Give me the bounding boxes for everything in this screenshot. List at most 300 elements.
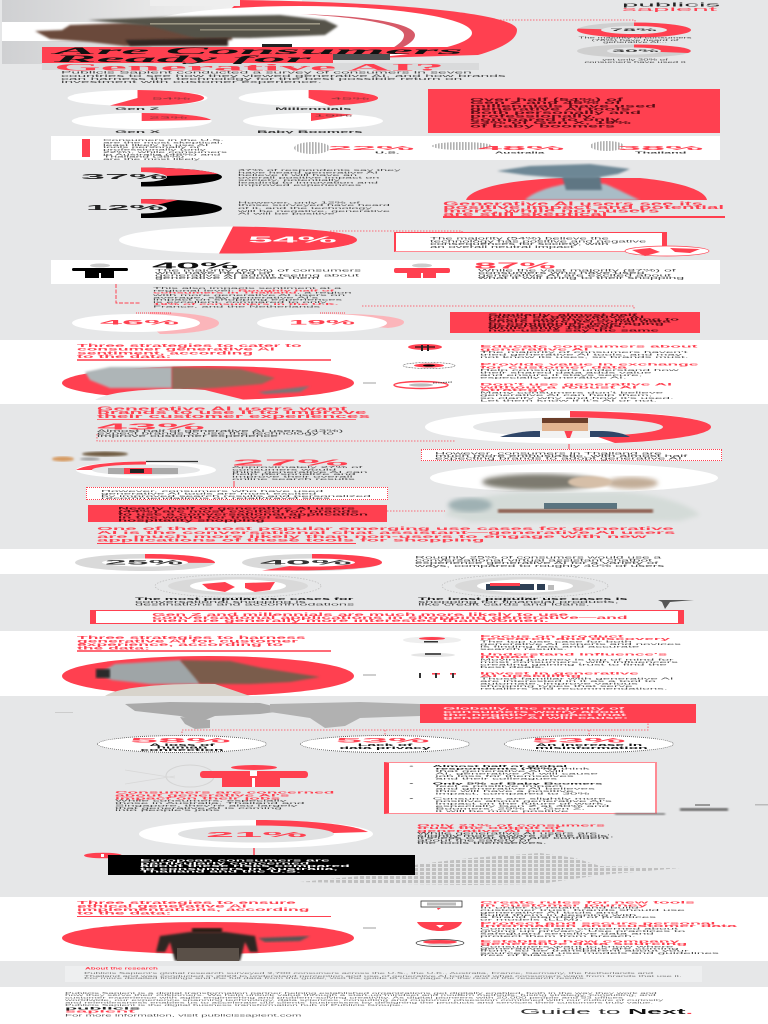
text: 40% description: The majority (60%) of consumers — [155, 268, 361, 272]
text: most popular use cases: conversational shopping is — [135, 600, 306, 604]
text: strategy 1 rules: In order to retain and build — [480, 906, 639, 909]
logo: publicis sapient footer — [65, 1007, 140, 1013]
text: job concerns — [115, 791, 334, 812]
chart: generation pies — [68, 90, 383, 129]
text: only 21% trust: the tools themselves. — [417, 842, 547, 845]
halftone map — [0, 696, 768, 896]
connector: dotted path from strip to paragraph — [116, 284, 634, 308]
text: bullet list: and their colleagues — [435, 777, 557, 780]
label: Australia: Australia — [495, 150, 544, 154]
text: callout copy: Thailand and the U.S. — [140, 869, 301, 873]
text: strategy 3 generative: shopping types that serve — [480, 684, 633, 688]
text: 40% description: generative AI excites them — [155, 276, 319, 280]
chart: 30% used generative AI — [577, 44, 691, 58]
text: regional sentiment: regional level: Roughly half of — [153, 288, 334, 292]
hero artwork: cyborg head on red arc — [2, 0, 517, 64]
text: callout copy: (44%) are most excited for brands — [118, 509, 359, 513]
text: strategy 1 rules: customer trust, brands should use — [480, 908, 685, 911]
text: about Publicis Sapient: how they serve their customers. We help unlock value through a start-up mindset and modern methods, fusing strategy, consulting, and — [65, 994, 656, 997]
icon: bird — [0, 574, 768, 631]
text: 27% description: think generative AI can — [232, 470, 367, 474]
text: regional sentiment: 19% of consumers in the U.K. — [153, 302, 338, 305]
text: 78% caption: generative AI... — [603, 41, 667, 44]
heading: users see positive impact: are still skeptical — [443, 212, 607, 217]
text: callout copy: However, consumers in Thailand are — [435, 451, 662, 455]
text: country summary: 22%), while consumers — [103, 151, 227, 154]
connector: dotted line to 78% donut — [500, 20, 636, 22]
text: chat assistant description: ways, compared to roughly 40% of users — [415, 564, 664, 568]
text: callout copy: Globally, the majority of — [443, 706, 624, 710]
logo: publicis sapient — [622, 2, 720, 13]
text: regional sentiment: is excellent, compared to only — [153, 300, 327, 303]
heading: users see positive impact: Generative AI users see its — [443, 201, 703, 206]
text: regional sentiment: consumers in Thailand, a region — [153, 290, 352, 294]
text: strategy 1 educate: generative AI — [480, 346, 589, 351]
text: 37% description: 37% of respondents say they — [238, 169, 400, 172]
heading: users see positive impact: positive impact and potential — [443, 205, 724, 210]
text: callout copy: to consumers in Australia, — [140, 866, 338, 870]
panel: customer experience expectations — [51, 406, 722, 544]
text: 37% description: have heard generative AI — [238, 171, 378, 174]
text: strategy 3 strategy: without a robust AI — [480, 384, 637, 389]
label: Gen X: Gen X — [115, 130, 160, 134]
text: only 21% trust: While generative AI users are — [417, 832, 597, 835]
text: 87% description — [478, 268, 684, 280]
text: callout copy — [470, 97, 656, 128]
text: strategy 3 strategy: Don't use generative AI — [480, 381, 672, 386]
heading: three strategies: the data: — [77, 645, 150, 650]
chart: 46% ring — [72, 312, 219, 334]
text: bullet list: impact, compared to 30% — [435, 792, 590, 795]
text: 12% description: of it, and the technology — [238, 206, 372, 210]
image: robot on red ellipse — [466, 162, 707, 201]
map: world map — [0, 696, 768, 736]
title block: Are Consumers Ready for Generative AI? — [42, 46, 479, 72]
text: callout copy: The majority (54%) believe the — [430, 237, 609, 240]
text: label: A loss of — [149, 743, 215, 747]
text: 78% caption: The majority of consumers — [578, 37, 692, 39]
text: 40% description: generative AI admit feeling about — [155, 273, 359, 277]
stat: 27%: 27% — [232, 458, 349, 468]
text: 37% description: society, potentially — [238, 179, 340, 182]
text: callout copy: However, consumers who have used — [101, 489, 323, 492]
text: callout copy: about these risks compared — [140, 863, 350, 867]
text: label — [535, 744, 643, 749]
text: chat assistant description: conversational virtual assistant chatbot — [415, 558, 652, 562]
text: callout copy: both personally and — [470, 110, 641, 115]
text: country summary: professionally (only — [103, 148, 206, 151]
stat oval: 53% increase in misinformation — [504, 735, 674, 753]
heading: users want brands to improve CX: their customer experiences — [97, 414, 370, 419]
text: bullet list: job loss for themselves — [435, 774, 574, 778]
text: label: misinformation — [535, 746, 648, 750]
text: strategy 2 value: for customer data — [480, 364, 627, 369]
text: 37% description: overall positive impact on — [238, 176, 379, 179]
box: research panel — [65, 966, 702, 982]
text: callout copy: generative AI tools — [470, 107, 630, 112]
text: chat assistant description — [415, 556, 664, 567]
heading: three strategies: Three strategies to harness — [77, 635, 306, 640]
chart: 54% pie — [119, 226, 462, 254]
text: strategy 1 discovery — [480, 635, 681, 650]
stat oval: 53% lack of data privacy — [300, 735, 470, 753]
image: woman with tablet — [0, 404, 768, 534]
callout: Thailand hotel booking — [86, 487, 388, 500]
text: 12% description: However, only 12% of — [238, 201, 360, 204]
text: 87% description: what it will bring to their shopping — [478, 276, 684, 280]
heading: users see positive impact: more, while non-users — [443, 208, 659, 214]
text: callout copy: the negative impact that — [443, 712, 626, 716]
stat: 53%: 53% — [336, 736, 430, 744]
text: bullet list: impact on the future of work, — [435, 802, 607, 805]
text: label: connection — [140, 748, 224, 752]
icons: strategy icons — [0, 631, 768, 696]
heading: conversational chat assistant: applications of these tools for shopping — [97, 538, 484, 543]
text: callout copy: hospitality shopping — [118, 518, 265, 522]
text: about Publicis Sapient: worldwide, our experience spanning technology, data sciences, consulting and customer obsession combined with our culture of curiosity — [65, 999, 663, 1002]
panel: three strategies to address generative AI implementations — [0, 897, 768, 961]
text: callout copy: non-users say the same — [488, 329, 659, 332]
icon: red person — [394, 264, 450, 278]
stat: 40%: 40% — [260, 558, 352, 566]
text: country summary: are the most likely — [103, 158, 200, 161]
text: strategy 1 rules: build them in keeping with — [480, 913, 636, 916]
panel: footer — [0, 987, 768, 1024]
text: strategy 3 strategy: so clarify why and how it's used. — [480, 396, 674, 399]
logo: publicis sapient footer: sapient — [65, 1010, 135, 1013]
heading: title lines: Ready for — [54, 53, 311, 64]
chart: 78% heard of generative AI — [577, 22, 691, 38]
text: callout copy — [430, 237, 646, 249]
callout: global worry — [420, 704, 696, 723]
text: 12% description: AI will be positive — [238, 212, 335, 215]
text: 87% description: consumers who have used — [478, 271, 645, 275]
text: callout copy — [140, 858, 350, 873]
maps: halftone countries — [294, 141, 623, 154]
text: about Publicis Sapient: and relentlessness enables us to accelerate our clients' businesses by designing the products and services their customers truly value. — [65, 1001, 653, 1004]
stat: 21%: 21% — [206, 830, 307, 838]
stat: 53%: 53% — [532, 736, 626, 744]
text: only 21% trust: slightly more aware of the tools', — [417, 834, 614, 837]
text: strategy 3 bias: Consumers want to know where — [480, 945, 673, 948]
text: strategy 3 strategy: Let them know if it's AI or not. — [480, 398, 657, 402]
heading: title lines — [50, 46, 463, 64]
text: strategy 3 bias: free of biases. — [480, 953, 565, 957]
text: callout copy — [443, 706, 628, 719]
text: chat assistant description: Roughly 25% of consumers would use a — [415, 556, 661, 559]
text: bullet list — [409, 765, 612, 813]
text: only 21% trust: about the safety of — [417, 839, 531, 842]
label: Baby Boomers 19%: 19% — [314, 114, 352, 117]
text: 37% description: improved experiences — [238, 184, 361, 187]
text: 40% description — [155, 268, 361, 280]
chart: 37% and 12% half donuts — [141, 168, 222, 218]
text: job concerns: that generative AI is coming — [115, 806, 282, 810]
callout: Gen Z and millennials — [90, 610, 684, 624]
text: bullet list: • Consumers are slightly more — [409, 797, 606, 800]
callout: over half of Gen Z — [428, 89, 720, 133]
stat: Australia 48%: 48% — [478, 145, 564, 151]
text: strategy 1 educate — [480, 343, 698, 358]
panel: about the research — [0, 961, 768, 987]
text: callout copy: Similarly, almost half — [488, 313, 637, 317]
text: callout copy — [118, 507, 368, 522]
text: bullet list: Boomers, 29% of Gen Z, — [435, 807, 585, 810]
text: strategy 1 educate: tried generative AI tools, and may — [480, 352, 682, 356]
text: only 21% trust: Only 21% of consumers — [417, 823, 605, 827]
text: 27% description: help personalize and — [232, 473, 356, 476]
stat: 25%: 25% — [105, 558, 183, 566]
text: strategy 2 influence: impact — [480, 655, 535, 659]
panel: country usage strip — [51, 136, 720, 160]
text: strategy 3 generative: AI upskilling — [480, 674, 581, 678]
chart: 19% ring — [257, 312, 404, 332]
stat: U.S. 22%: 22% — [328, 145, 414, 151]
marker: red oval — [0, 696, 768, 866]
text: strategy 2 influence: creating gaining trust to find the — [480, 663, 667, 666]
text: callout copy: technology has positive and negative — [430, 239, 646, 243]
text: only 21% trust — [417, 824, 614, 845]
connector: line to hotel callout — [0, 404, 768, 514]
text: callout copy: generative AI tools are most excited — [101, 491, 316, 495]
text: regional sentiment: France, and the Netherlands — [153, 304, 320, 308]
text: strategy 1 rules: or models (LLM). — [480, 918, 583, 921]
text: callout copy — [101, 490, 371, 499]
label: Gen X 23%: 23% — [149, 116, 187, 119]
marker: red bar — [82, 139, 90, 157]
panel: global concerns — [0, 696, 768, 897]
text: callout copy: (46%) of generative AI — [488, 315, 644, 319]
text: callout copy: recommendations on retail/travel sites — [101, 496, 330, 499]
text: callout copy: by improved search results and personalized — [101, 494, 371, 497]
text: job concerns: into people's jobs — [115, 808, 220, 812]
text: strategy 2 value: Provide value in exchange — [480, 361, 698, 366]
chart: 25% and 40% donuts — [0, 549, 768, 574]
text: callout copy: European consumers are — [140, 858, 330, 862]
callout: European consumers — [108, 855, 415, 875]
text: callout copy: millennials have used — [470, 104, 656, 108]
text: regional sentiment: This also impacts sentiment at a — [153, 286, 341, 289]
label: Gen Z: Gen Z — [115, 107, 159, 110]
text: 43% description: Almost half of generative AI users (43%) — [97, 429, 343, 433]
text: regional sentiment: average, say generative AI's — [153, 295, 318, 298]
text: 30% caption — [584, 58, 686, 64]
text: strategy 3 strategy — [480, 381, 674, 402]
text: 43% description: expect brands to use the technology to — [97, 432, 334, 435]
text: 37% description — [238, 169, 400, 187]
text: bullet list: • Almost half of global — [409, 764, 567, 768]
text: callout copy: consumers worry about — [443, 709, 624, 713]
icon: scattered debris — [0, 696, 768, 826]
text: strategy 2 value: especially generative AI. — [480, 375, 627, 379]
text: least popular use cases: shopping for financial products, — [418, 600, 619, 604]
text: job concerns: Consumers are concerned — [115, 790, 334, 794]
text: strategy 1 discovery: generative AI experts and novices — [480, 642, 681, 646]
stat: 58%: 58% — [130, 736, 231, 744]
text: research description: Thailand and was conducted in 2023 to understand perception and use of generative AI tools, and what consumers want from brands that use it. — [84, 974, 682, 977]
label: Millennials 45%: 45% — [331, 97, 369, 100]
stat: 54%: 54% — [248, 235, 337, 245]
connector: dotted bracket to ovals — [0, 696, 768, 756]
text: strategy 2 privacy: information and customer data — [480, 924, 737, 928]
rule: heading underline — [77, 359, 331, 360]
text: country summary: Thailand (38%) — [103, 155, 184, 158]
text: strategy 2 influence: Moving journey is top of mind for — [480, 658, 674, 661]
heading: about the research: About the research — [85, 967, 158, 971]
icon: red worker with faint gear — [0, 696, 768, 796]
text: callout copy: while only 19% of — [488, 326, 613, 330]
heading: users see positive impact — [443, 201, 724, 217]
text: strategy 3 generative: Those familiar with generative AI — [480, 677, 674, 680]
text: job concerns: those in Australia, Thailand and — [115, 801, 304, 805]
text: 27% description: Approximately 27% of — [232, 465, 362, 469]
text: country summary: are the most skeptical, — [103, 141, 223, 144]
chart: 43% ring with businessman — [0, 404, 768, 464]
text: intro paragraph: investment with customer experience. — [61, 80, 322, 84]
text: job concerns: impact on their jobs — [115, 796, 280, 800]
text: strategy 3 bias: sources and use models and guidelines — [480, 951, 719, 955]
rule: heading underline — [443, 216, 725, 218]
text: strategy 2 influence: best deals. — [480, 665, 545, 669]
text: label: human — [156, 745, 208, 750]
text: callout copy: particularly concerned — [140, 861, 309, 865]
logo: Guide to Next: Guide to Next. — [520, 1007, 693, 1015]
text: strategy 1 educate: Educate consumers about — [480, 343, 697, 348]
text: most popular use cases: destinations and accommodations — [135, 603, 354, 607]
text: callout copy: in the world for travel and — [118, 515, 301, 519]
text: 78% caption — [578, 36, 692, 44]
text: callout copy: generative AI tools, — [488, 324, 626, 328]
text: most popular use cases — [135, 598, 354, 606]
text: callout copy — [152, 612, 628, 622]
heading: three strategies: ethical generative AI — [77, 904, 247, 908]
text: about Publicis Sapient — [65, 992, 663, 1006]
text: strategy 2 value: and ensure it stays secure, — [480, 373, 642, 376]
text: least popular use cases: The least popular use cases is — [418, 597, 628, 601]
text: strategy 1 educate: The majority of consumers haven't — [480, 350, 687, 353]
text: strategy 3 generative: are interested in it as a tool to — [480, 679, 656, 683]
text: regional sentiment — [153, 286, 352, 308]
text: strategy 2 privacy: Consumers are concerned about — [480, 927, 678, 930]
text: callout copy — [488, 313, 679, 332]
text: 30% caption: consumers have used it — [584, 61, 686, 64]
text: label — [331, 744, 439, 749]
heading: three strategies: to the data: — [77, 910, 171, 915]
image: person in helmet on red ellipse — [0, 631, 768, 696]
stat: 43%: 43% — [97, 422, 205, 432]
text: callout copy: generative AI will cause: — [443, 716, 628, 720]
stat: 40%: 40% — [152, 261, 238, 271]
heading: three strategies: Three strategies to ensure — [77, 900, 296, 905]
text: strategy 3 generative: retailers and recommendations. — [480, 687, 668, 690]
text: 12% description: those surveyed have heard — [238, 204, 390, 207]
text: country summary: least likely to use AI — [103, 143, 208, 146]
stat: 19%: 19% — [289, 318, 355, 326]
text: strategy 3 bias: Establish how company — [480, 939, 679, 943]
text: 27% description: improve their overall — [232, 475, 353, 478]
text: bullet list: feel a positive impact — [435, 784, 562, 788]
heading: conversational chat assistant — [97, 527, 675, 542]
text: 37% description: leading to innovation and — [238, 181, 378, 184]
text: label: data privacy — [339, 746, 430, 750]
heading: users want brands to improve CX: brands to use it to improve — [97, 410, 367, 415]
text: more information: For more information, visit publicissapient.com — [65, 1013, 301, 1017]
text: callout copy: an overall neutral impact — [430, 245, 574, 249]
text: only 21% trust: generative AI tools — [417, 828, 565, 833]
text: strategy 2 privacy: Protect and secure personal — [480, 921, 715, 925]
text: callout copy: Gen Z and 45% of — [470, 100, 621, 105]
text: job concerns: Singapore, they're also largely — [115, 804, 297, 807]
logo: publicis sapient footer: publicis — [65, 1007, 140, 1010]
panel: header and survey overview — [2, 0, 725, 334]
text: job concerns: about generative AI's — [115, 793, 290, 797]
text: strategy 1 discovery: is finding fast and accurate — [480, 645, 639, 648]
panel: attitudes strip — [51, 260, 720, 284]
text: strategy 2 value: Help consumers understand how — [480, 368, 679, 371]
rule: heading underline — [97, 418, 356, 420]
text: strategy 1 rules — [480, 900, 695, 921]
text: research description: Publicis Sapient's global research surveyed 3,700 consumers across the U.S., the U.K., Australia, France, Germany, the Netherlands and — [84, 971, 653, 974]
text: strategy 3 strategy: strategy — [480, 387, 548, 391]
text: bullet list: respondents (46%) think — [435, 767, 590, 770]
icons: strategy icons — [363, 344, 456, 390]
text: strategy 2 value: their shared data adds value — [480, 370, 652, 374]
heading: three strategies: to the data: — [77, 354, 171, 359]
text: bullet list: and generative AI believes — [435, 787, 595, 790]
stat: 87%: 87% — [474, 261, 556, 271]
chart: 27% ring — [0, 404, 768, 494]
text: bullet list: it will be more positive — [435, 809, 568, 813]
heading: users want brands to improve CX: Generative AI users want — [97, 406, 347, 412]
text: label — [128, 744, 236, 751]
text: 27% description — [232, 466, 367, 480]
text: 78% caption: (78%) have heard of — [592, 39, 678, 42]
text: most popular use cases: The most popular use cases for — [135, 597, 353, 601]
text: 12% description: will be negative, generative — [238, 209, 390, 212]
text: job concerns: While consumers, especially — [115, 799, 286, 802]
text: strategy 2 influence — [480, 653, 678, 668]
text: bullet list: that generative AI will — [435, 769, 564, 773]
text: about Publicis Sapient: customer experience with agile engineering and problem-solving creativity. As digital pioneers with 20,000 people and 53 offices — [65, 996, 623, 1000]
text: strategy 1 discovery: search results. — [480, 647, 567, 651]
text: strategy 2 influence: Understand influence's — [480, 652, 667, 656]
text: strategy 3 bias: generative data sourcing — [480, 942, 687, 946]
callout: willing to share data — [450, 312, 700, 333]
stat: 12%: 12% — [86, 204, 164, 212]
text: bullet list: this will have a positive — [435, 789, 574, 793]
panel: bullet facts — [384, 762, 657, 814]
text: 30% caption: yet only 30% of — [602, 59, 668, 61]
text: callout copy: Gen Z and millennials are much more likely to use — [152, 612, 568, 616]
text: least popular use cases — [418, 598, 628, 606]
text: label: An increase in — [536, 743, 642, 747]
text: callout copy: Over half (54%) of — [470, 97, 623, 102]
text: bullet list: AI, generative AI will cause — [435, 772, 598, 775]
heading: three strategies — [77, 636, 306, 650]
text: strategy 1 rules: a brand standard of practices — [480, 915, 656, 918]
heading: three strategies: generative AI for customer — [77, 639, 298, 643]
text: callout copy — [435, 452, 687, 459]
text: regional sentiment: impact on shopping experiences — [153, 297, 342, 301]
text: strategy 1 rules: generative AI tools and — [480, 910, 618, 914]
text: callout copy: to companies leveraging — [488, 322, 664, 326]
text: strategy 1 rules: in customer journey — [480, 902, 647, 907]
text: callout copy: men are generally more interested than women. — [152, 618, 549, 622]
icon: black person — [72, 264, 128, 278]
text: label: Lack of — [358, 743, 412, 747]
text: strategy 3 generative: Invest in generative — [480, 671, 639, 675]
text: research description — [84, 972, 682, 979]
